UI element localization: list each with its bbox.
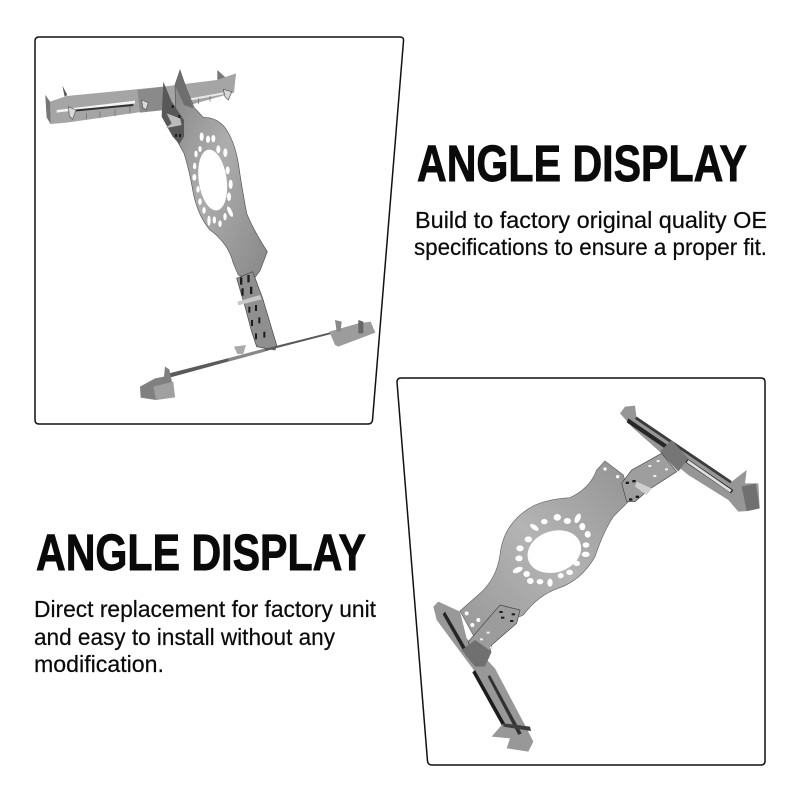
main plate with holes xyxy=(460,461,630,638)
lower rail rod and end blocks xyxy=(140,320,375,400)
text block: top right description: specifications to ensure a proper fit. xyxy=(414,234,767,260)
text block: top right description xyxy=(414,207,767,260)
panel: bottom right product frame xyxy=(397,378,765,765)
text block: top right description: Build to factory original quality OE xyxy=(415,207,767,233)
upper rail xyxy=(620,406,760,512)
icon: bracket side view xyxy=(45,70,375,400)
text block: bottom left description: modification. xyxy=(34,651,164,677)
text block: bottom left description xyxy=(34,596,377,677)
lower strap xyxy=(237,272,277,350)
upper strap xyxy=(622,453,677,502)
panel: top left product frame xyxy=(35,37,404,424)
text block: bottom left description: Direct replacement for factory unit xyxy=(34,596,377,622)
lower strap xyxy=(462,605,520,667)
heading: bottom left: ANGLE DISPLAY xyxy=(36,524,366,581)
icon: bracket front view xyxy=(433,406,760,752)
text block: bottom left description: and easy to install without any xyxy=(34,624,335,650)
upper strap xyxy=(162,70,193,144)
wing nuts xyxy=(68,89,232,119)
lower rail xyxy=(433,602,533,752)
main plate with holes xyxy=(175,70,267,281)
top rail xyxy=(45,70,236,124)
